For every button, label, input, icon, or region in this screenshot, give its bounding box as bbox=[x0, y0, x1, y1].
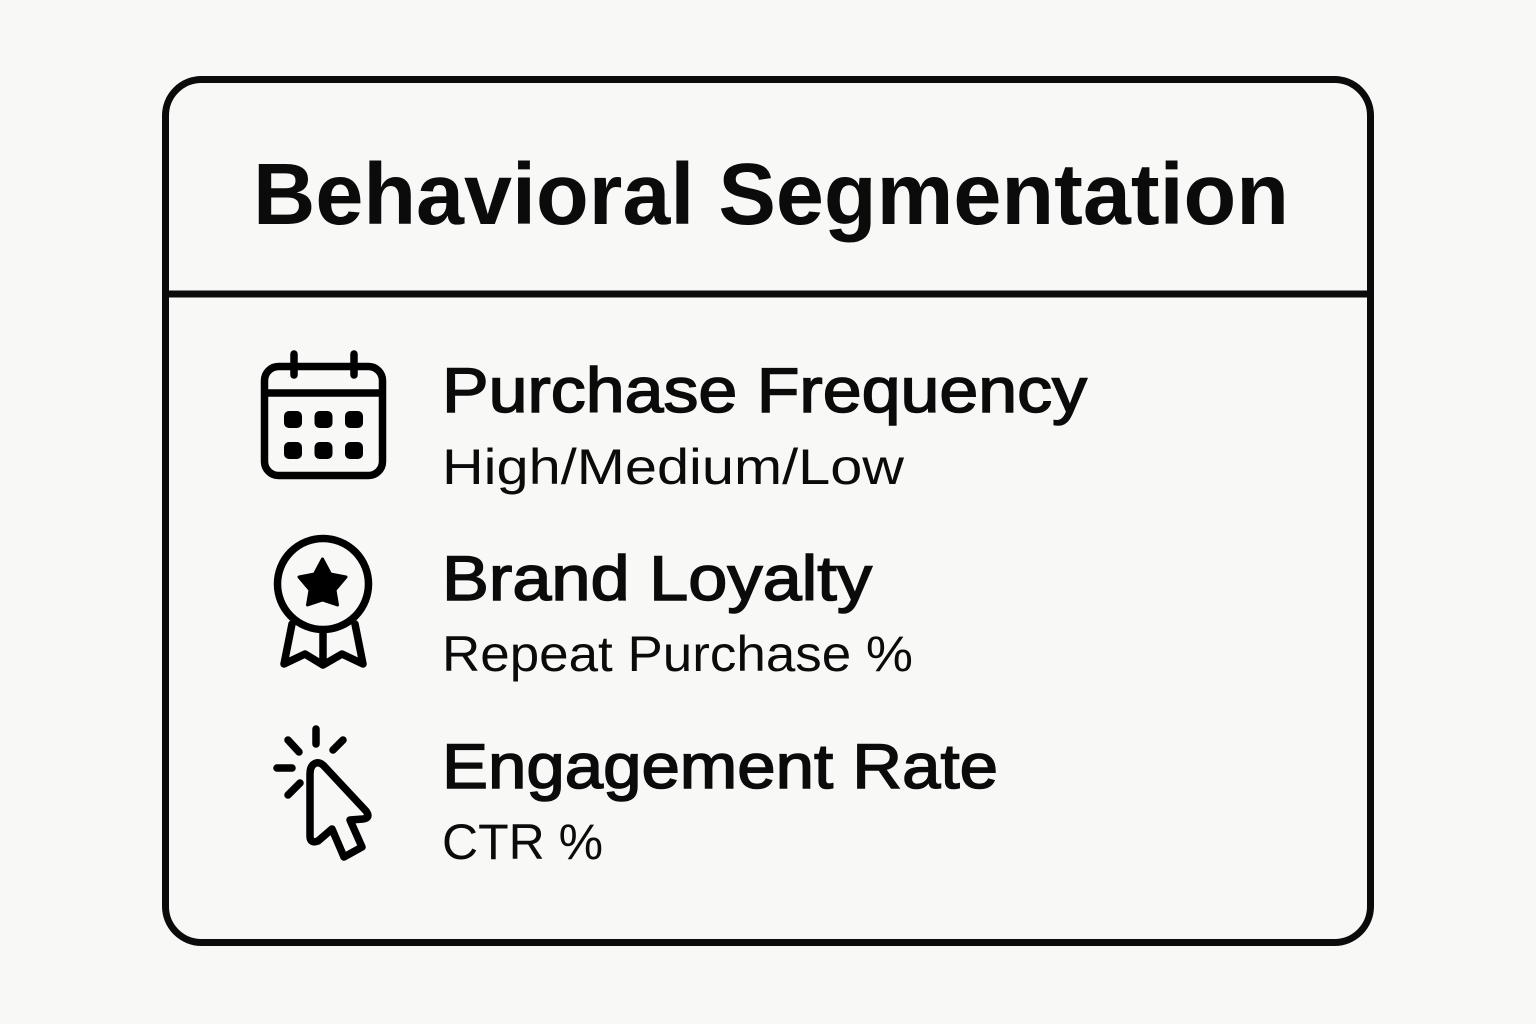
heading: purchase frequency: Purchase Frequency bbox=[442, 356, 1088, 426]
title: Behavioral Segmentation bbox=[253, 146, 1289, 243]
text: purchase frequency levels: High/Medium/Low bbox=[442, 439, 905, 495]
heading: brand loyalty: Brand Loyalty bbox=[442, 544, 873, 614]
text: repeat purchase percent: Repeat Purchase % bbox=[442, 626, 913, 682]
icon: calendar bbox=[264, 354, 382, 476]
icon: award ribbon bbox=[278, 538, 368, 665]
heading: engagement rate: Engagement Rate bbox=[442, 732, 998, 802]
panel: behavioral segmentation card bbox=[166, 80, 1370, 942]
icon: clicking cursor bbox=[277, 729, 368, 857]
text: click-through rate percent: CTR % bbox=[442, 814, 603, 870]
